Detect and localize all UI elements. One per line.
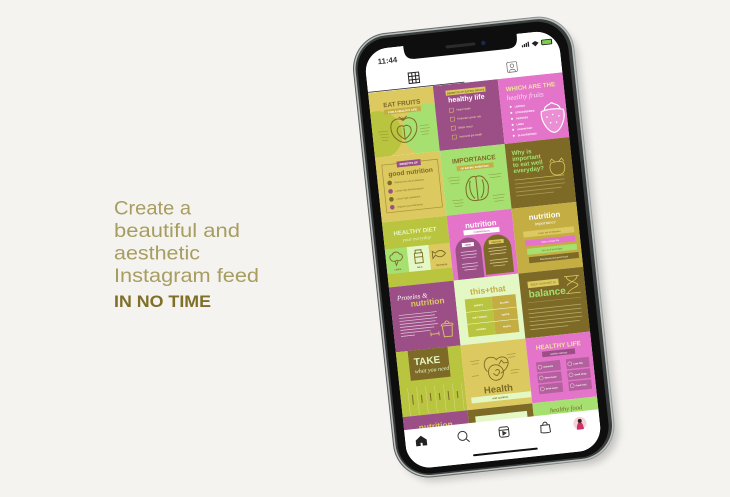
headline text: aesthetic (114, 242, 200, 264)
tile: which are the healthy fruits: GRAPEFRUIT (517, 127, 533, 131)
tile: nutrition partial: nutrition (418, 419, 453, 432)
tile: which are the healthy fruits: LEMONS (515, 104, 525, 108)
tile: healthy life nutrition advices: Good sleep (574, 373, 587, 376)
tile: healthy life benefits (433, 79, 505, 151)
tile: importance of eating everyday: IMPORTANCE (452, 154, 497, 166)
tile: importance of eating everyday: OF EATING EVERYDAY (460, 164, 489, 171)
home indicator (473, 447, 538, 456)
tile: this and that: SALADS (500, 301, 509, 305)
icon: tagged tab (507, 62, 518, 73)
tile: good nutrition: Improve your well-being (397, 203, 423, 209)
tile: proteins and nutrition: nutrition (410, 295, 445, 309)
tile: take what you need: what you need (415, 366, 451, 375)
tile: nutrition partial (403, 410, 470, 437)
tile: why is important: Why is (511, 148, 532, 157)
bottom navigation (404, 409, 603, 472)
phone shadow (357, 23, 622, 484)
tile: nutrition importance: Get rid of bad habits (542, 247, 563, 252)
tile: this and that (454, 274, 525, 345)
tile: health: and nutrition (492, 395, 509, 400)
phone body (349, 13, 618, 481)
status bar and tabs (363, 29, 562, 93)
tile: nutrition arches: nutrition (465, 218, 497, 230)
tile: healthy life nutrition advices: Less fats (573, 361, 584, 366)
tile: good nutrition: BENEFITS OF (399, 160, 418, 166)
tile: healthy diet: PROTEINS (436, 264, 448, 267)
tile: take what you need (396, 345, 467, 417)
icon: grid tab (408, 72, 420, 84)
tile: healthy life benefits: Heart health (456, 106, 471, 112)
tile: healthy life benefits: Improved gut health (459, 132, 483, 139)
tile: importance of eating everyday (440, 144, 512, 216)
tile: healthy life nutrition advices: Nutrients (543, 365, 554, 369)
tile: why is important: important (512, 153, 541, 163)
tile: why is important (505, 137, 576, 209)
tile: take what you need: TAKE (413, 355, 441, 368)
tile: wellness script partial: healthy food (550, 404, 583, 414)
tile: good nutrition: good nutrition (388, 167, 433, 178)
headline text: Instagram feed (114, 265, 259, 287)
tile: healthy diet: HEALTHY DIET (393, 227, 437, 237)
tile: healthy life nutrition advices: HEALTHY LIFE (536, 340, 582, 352)
status icons (521, 39, 552, 48)
tile: balance: balance (528, 286, 567, 301)
tile: which are the healthy fruits: WHICH ARE THE (505, 81, 556, 93)
icon: home (416, 436, 427, 446)
headline text (114, 198, 259, 311)
emphasis line: IN NO TIME (114, 293, 211, 311)
tile: healthy life benefits: Reduced cancer risk (457, 114, 482, 121)
tile: why is important: everyday? (513, 165, 545, 175)
tile: this and that: SOFT DRINKS (472, 316, 488, 320)
tile: which are the healthy fruits: LIMES (516, 123, 524, 126)
tile: this and that: CANDIES (476, 327, 487, 331)
tile: healthy life benefits: Better mood (458, 124, 473, 130)
tile: nutrition arches (447, 209, 518, 281)
tile: which are the healthy fruits: BLACKBERRIES (518, 132, 537, 137)
tile: balance: KEEP YOUR DIET IN (531, 280, 556, 287)
tile: proteins and nutrition: Proteins & (396, 291, 428, 303)
tile: healthy life nutrition advices: Drink water (546, 386, 558, 391)
tile: which are the healthy fruits: ORANGES (516, 116, 529, 120)
icon: search (458, 431, 470, 443)
tile: why is important: to eat well (513, 159, 543, 169)
tile: good nutrition: Lower high blood pressure (395, 187, 424, 193)
headline text: beautiful and (114, 220, 240, 242)
icon: profile photo (574, 416, 586, 430)
screen (366, 32, 600, 468)
tile: healthy life benefits: BENEFITS OF EATING FRUITS (447, 87, 485, 95)
tile: this and that: SWEETS (474, 305, 484, 308)
tile: healthy diet: MILK (417, 267, 423, 269)
tile: nutrition importance: Lower risk of diseases (538, 230, 562, 235)
tile: healthy life nutrition advices: Slow meals (545, 376, 557, 380)
tile: olive partial (468, 403, 534, 424)
tile: proteins and nutrition (389, 281, 461, 352)
tile: healthy diet (382, 216, 454, 287)
tile: nutrition importance: Feel strong and good mood (540, 255, 569, 261)
tile: eat fruits: EAT FRUITS (383, 98, 421, 109)
tile: nutrition importance (512, 202, 583, 274)
tile: healthy life nutrition advices: nutrition advices (550, 351, 568, 356)
tile: healthy life benefits: healthy life (448, 94, 485, 105)
tile: which are the healthy fruits: STRAWBERRIES (515, 109, 535, 114)
tile: nutrition importance: nutrition (528, 210, 561, 222)
tile: this and that: FRUITS (503, 326, 511, 329)
tile: healthy life nutrition advices (525, 332, 597, 403)
tile: healthy diet: LIMES (395, 269, 402, 272)
icon: reels (499, 426, 509, 437)
tile: which are the healthy fruits: healthy fruits (506, 90, 544, 102)
tile: eat fruits (368, 86, 440, 158)
icon: shop (540, 422, 551, 433)
tile: health (461, 338, 532, 410)
tile: eat fruits: FOR A HEALTHY LIFE (388, 107, 417, 114)
tile: nutrition importance: Keep a longer life (541, 239, 560, 244)
tile: healthy diet: your everyday (401, 235, 432, 244)
tile: balance (518, 267, 590, 338)
notch (403, 33, 518, 60)
tile: nutrition arches: PROTEIN (491, 241, 502, 244)
tile: nutrition importance: importance (535, 219, 556, 226)
tile: healthy life nutrition advices: Fresh fruit (576, 383, 587, 387)
tile: this and that: this+that (470, 283, 506, 297)
tile: wellness script partial (532, 396, 600, 416)
tile: good nutrition (375, 151, 447, 223)
tile: nutrition arches: COMPARISON (473, 229, 490, 234)
active tab line (368, 82, 464, 93)
clock: 11:44 (377, 55, 398, 66)
tile: good nutrition: Reduce the risk of diseases (395, 178, 425, 184)
tile: which are the healthy fruits (498, 72, 569, 144)
tile: good nutrition: Lower high cholesterol (396, 195, 421, 201)
tile: nutrition arches: FIBER (465, 244, 472, 247)
phone mockup (344, 13, 622, 486)
tile: this and that: WATER (502, 313, 510, 317)
tile: health: Health (483, 383, 514, 397)
headline text: Create a (114, 198, 191, 220)
